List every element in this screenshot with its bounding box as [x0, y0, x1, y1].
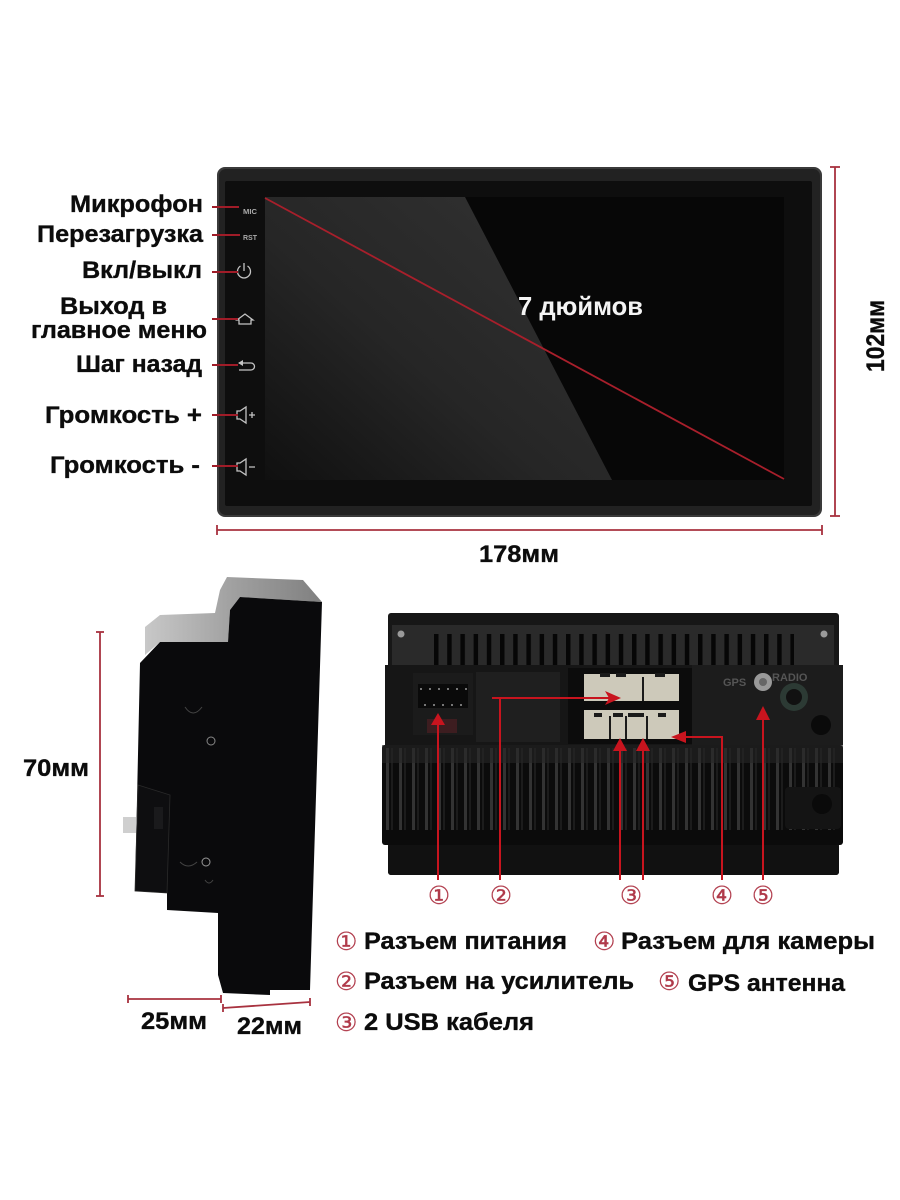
arrow 5	[756, 706, 770, 880]
depth dimension 25 mm	[128, 995, 221, 1003]
legend item 1: Разъем питания	[364, 928, 567, 955]
screen size label: 7 дюймов	[518, 291, 643, 321]
middle connector band	[385, 665, 843, 745]
height label: 102мм	[862, 300, 890, 372]
connector legend	[335, 927, 875, 1037]
white connectors	[584, 674, 679, 739]
legend item 4: Разъем для камеры	[621, 928, 875, 955]
button labels: Перезагрузка	[37, 221, 204, 248]
legend item 1: ①	[335, 927, 357, 956]
button labels: Шаг назад	[76, 351, 202, 378]
depth label 25 mm: 25мм	[141, 1008, 207, 1035]
arrow 4	[671, 731, 722, 880]
connector numbers	[428, 881, 774, 910]
depth dimension 22 mm	[223, 998, 310, 1012]
connector numbers: ②	[490, 881, 512, 910]
button callout lines	[212, 207, 240, 466]
legend item 3: 2 USB кабеля	[364, 1009, 534, 1036]
antenna sockets	[723, 672, 831, 735]
heat sink fins	[382, 745, 843, 845]
button labels: Громкость +	[45, 402, 202, 429]
button labels: Громкость -	[50, 452, 200, 479]
button labels: главное меню	[31, 317, 207, 344]
legend item 4: ④	[593, 927, 615, 956]
height dimension	[830, 167, 840, 516]
front panel of the head unit	[217, 167, 822, 517]
width dimension	[217, 525, 822, 535]
button labels: Микрофон	[70, 191, 203, 218]
side view of the head unit	[123, 577, 322, 995]
legend item 5: ⑤	[658, 967, 680, 996]
width label: 178мм	[479, 541, 559, 568]
antenna sockets: GPS	[723, 677, 746, 689]
connector numbers: ③	[620, 881, 642, 910]
arrow 3 left	[613, 738, 627, 880]
legend item 2: ②	[335, 967, 357, 996]
depth label 22 mm: 22мм	[237, 1013, 302, 1040]
side view height dimension	[96, 632, 104, 896]
button labels: Выход в	[60, 293, 167, 320]
top vents	[434, 634, 794, 665]
screen	[265, 197, 784, 480]
legend item 2: Разъем на усилитель	[364, 968, 634, 995]
button labels	[31, 191, 207, 479]
connector numbers: ④	[711, 881, 733, 910]
screws	[398, 630, 828, 856]
connector arrows	[431, 691, 770, 880]
button labels: Вкл/выкл	[82, 257, 202, 284]
connector numbers: ①	[428, 881, 450, 910]
screen diagonal line	[265, 198, 784, 479]
ISO connector	[413, 673, 473, 735]
side height label: 70мм	[23, 755, 89, 782]
arrow 3 right	[636, 738, 650, 880]
arrow 1	[431, 713, 445, 880]
front panel button icons: RST	[243, 235, 258, 242]
arrow 2	[492, 691, 621, 880]
rear view of the head unit	[382, 613, 843, 875]
legend item 5: GPS антенна	[688, 970, 846, 997]
front panel button icons	[237, 209, 258, 475]
legend item 3: ③	[335, 1008, 357, 1037]
antenna sockets: RADIO	[772, 672, 808, 684]
front panel button icons: MIC	[243, 209, 257, 216]
connector numbers: ⑤	[752, 881, 774, 910]
